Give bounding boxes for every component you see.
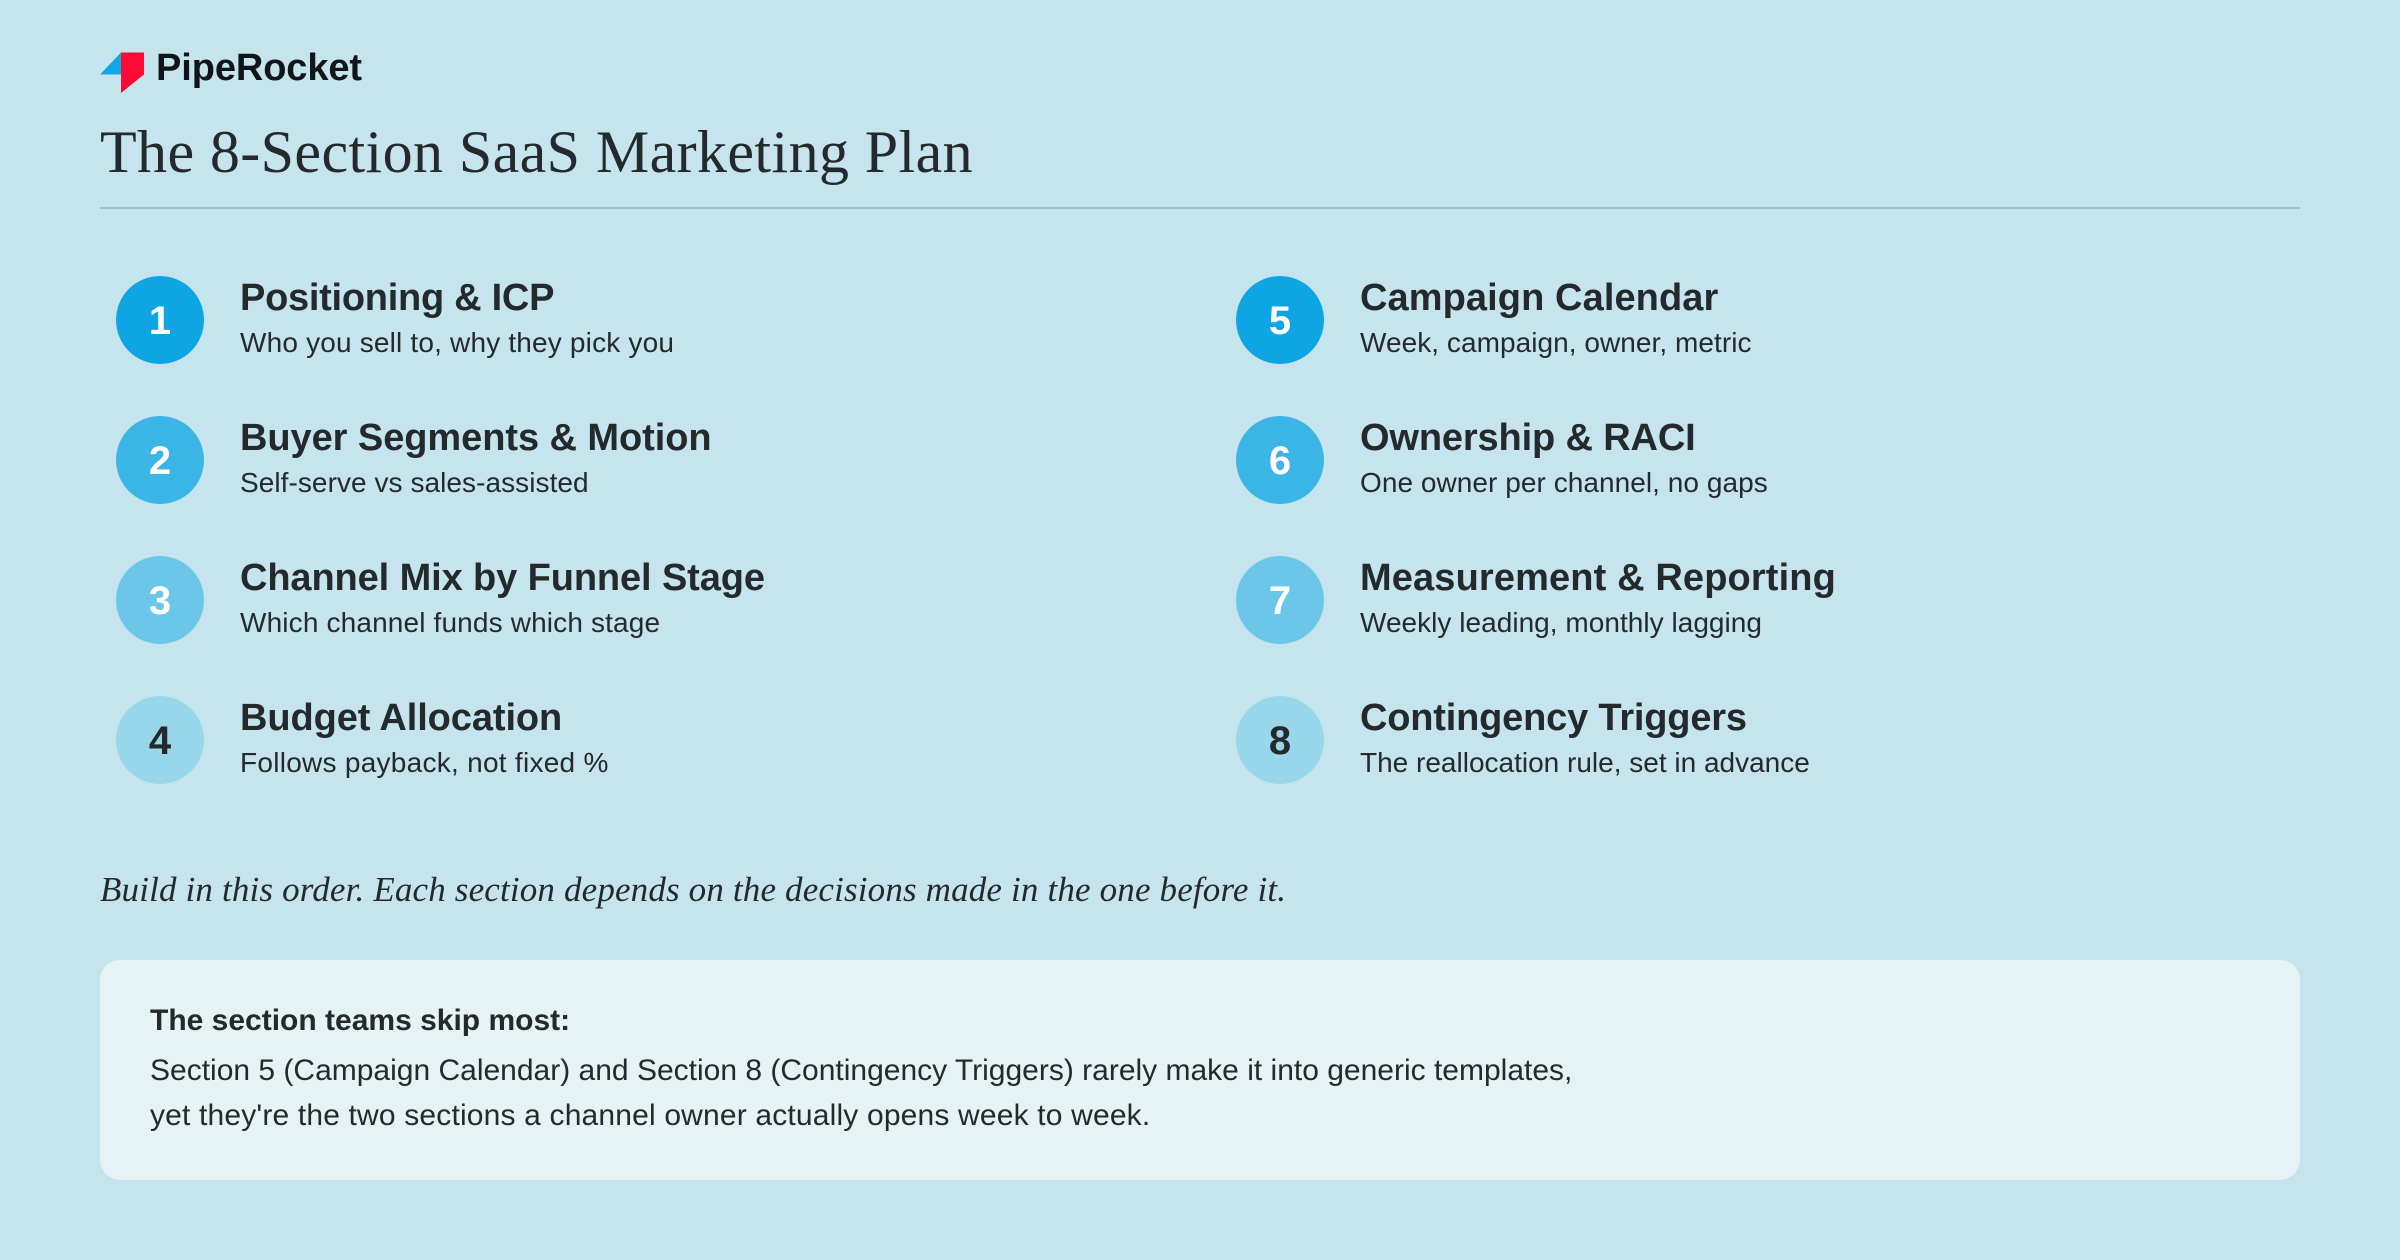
number 3: 3	[149, 579, 171, 623]
heading 8: Contingency Triggers	[1360, 697, 1747, 739]
number 1: 1	[149, 299, 171, 343]
logo wordmark: PipeRocket	[156, 47, 362, 89]
item 3	[116, 556, 765, 644]
number 1	[116, 276, 204, 364]
item 5	[1236, 276, 1752, 364]
callout body: Section 5 (Campaign Calendar) and Section 8 (Contingency Triggers) rarely make it into generic templates,	[150, 1054, 1572, 1087]
heading 3: Channel Mix by Funnel Stage	[240, 557, 765, 599]
item 6	[1236, 416, 1768, 504]
item 8	[1236, 696, 1810, 784]
heading 6: Ownership & RACI	[1360, 417, 1696, 459]
item 7	[1236, 556, 1836, 644]
number 4	[116, 696, 204, 784]
item 2	[116, 416, 712, 504]
icon: rocket mark	[100, 52, 144, 93]
description 2: Self-serve vs sales-assisted	[240, 467, 589, 498]
number 8: 8	[1269, 719, 1291, 763]
heading 2: Buyer Segments & Motion	[240, 417, 712, 459]
italic note: Build in this order. Each section depends on the decisions made in the one before it.	[100, 870, 1286, 909]
heading 5: Campaign Calendar	[1360, 277, 1718, 319]
heading 7: Measurement & Reporting	[1360, 557, 1836, 599]
number 3	[116, 556, 204, 644]
number 5: 5	[1269, 299, 1291, 343]
item 4	[116, 696, 609, 784]
number 2: 2	[149, 439, 171, 483]
number 2	[116, 416, 204, 504]
number 8	[1236, 696, 1324, 784]
number 7	[1236, 556, 1324, 644]
description 4: Follows payback, not fixed %	[240, 747, 609, 778]
callout panel	[100, 960, 2300, 1180]
description 6: One owner per channel, no gaps	[1360, 467, 1768, 498]
description 7: Weekly leading, monthly lagging	[1360, 607, 1762, 638]
number 4: 4	[149, 719, 171, 763]
description 5: Week, campaign, owner, metric	[1360, 327, 1752, 358]
number 5	[1236, 276, 1324, 364]
heading 1: Positioning & ICP	[240, 277, 554, 319]
callout body	[150, 1054, 1572, 1132]
callout body: yet they're the two sections a channel owner actually opens week to week.	[150, 1099, 1150, 1132]
callout heading: The section teams skip most:	[150, 1004, 570, 1037]
heading 4: Budget Allocation	[240, 697, 562, 739]
title: The 8-Section SaaS Marketing Plan	[100, 119, 973, 185]
number 6	[1236, 416, 1324, 504]
number 7: 7	[1269, 579, 1291, 623]
logo	[100, 47, 362, 93]
number 6: 6	[1269, 439, 1291, 483]
description 8: The reallocation rule, set in advance	[1360, 747, 1810, 778]
description 3: Which channel funds which stage	[240, 607, 660, 638]
description 1: Who you sell to, why they pick you	[240, 327, 674, 358]
item 1	[116, 276, 674, 364]
